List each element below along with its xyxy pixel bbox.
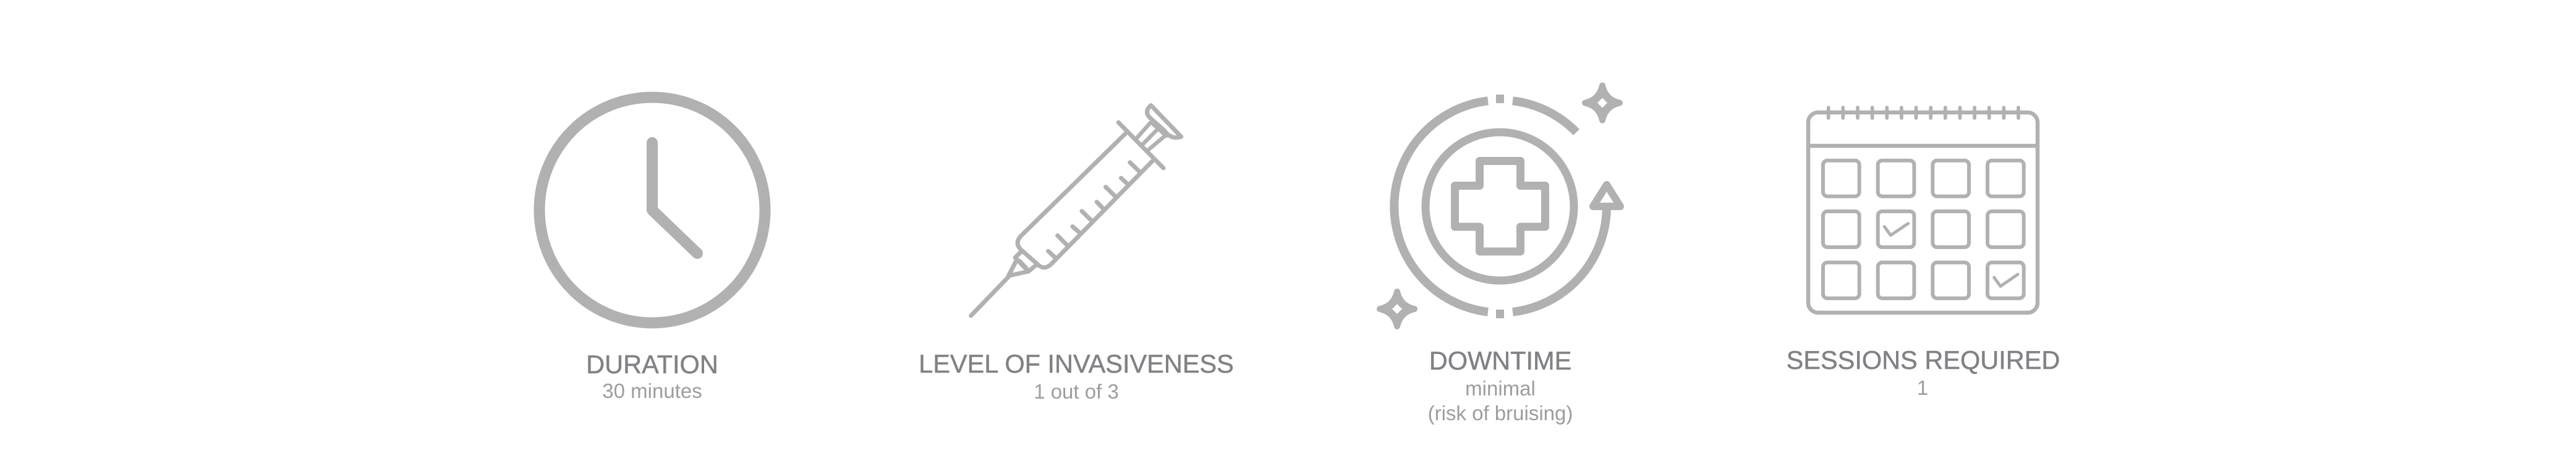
icon: calendar <box>1808 108 2038 313</box>
panel: level of invasiveness <box>919 105 1234 403</box>
text: downtime note: (risk of bruising) <box>1428 402 1573 425</box>
text: downtime value: minimal <box>1465 377 1536 400</box>
outer ring arcs <box>1394 99 1607 314</box>
text: sessions value: 1 <box>1917 376 1928 399</box>
icon: recovery cycle with medical cross <box>1380 85 1620 326</box>
icon: sparkle bottom left <box>1380 292 1414 326</box>
icon: clock <box>539 98 765 323</box>
inner ring <box>1426 132 1574 281</box>
panel: sessions required <box>1787 108 2060 399</box>
icon: medical cross <box>1455 161 1545 251</box>
panel: downtime <box>1380 85 1620 425</box>
text: duration value: 30 minutes <box>602 379 702 402</box>
panel: duration <box>539 98 765 402</box>
icon: syringe <box>971 105 1181 316</box>
text: invasiveness value: 1 out of 3 <box>1034 380 1119 403</box>
heading: downtime: DOWNTIME <box>1429 346 1571 375</box>
icon: arrow head <box>1593 185 1620 206</box>
heading: sessions required: SESSIONS REQUIRED <box>1787 345 2060 374</box>
icon: sparkle top right <box>1585 85 1620 120</box>
heading: duration: DURATION <box>586 350 718 379</box>
heading: level of invasiveness: LEVEL OF INVASIVENESS <box>919 349 1234 378</box>
